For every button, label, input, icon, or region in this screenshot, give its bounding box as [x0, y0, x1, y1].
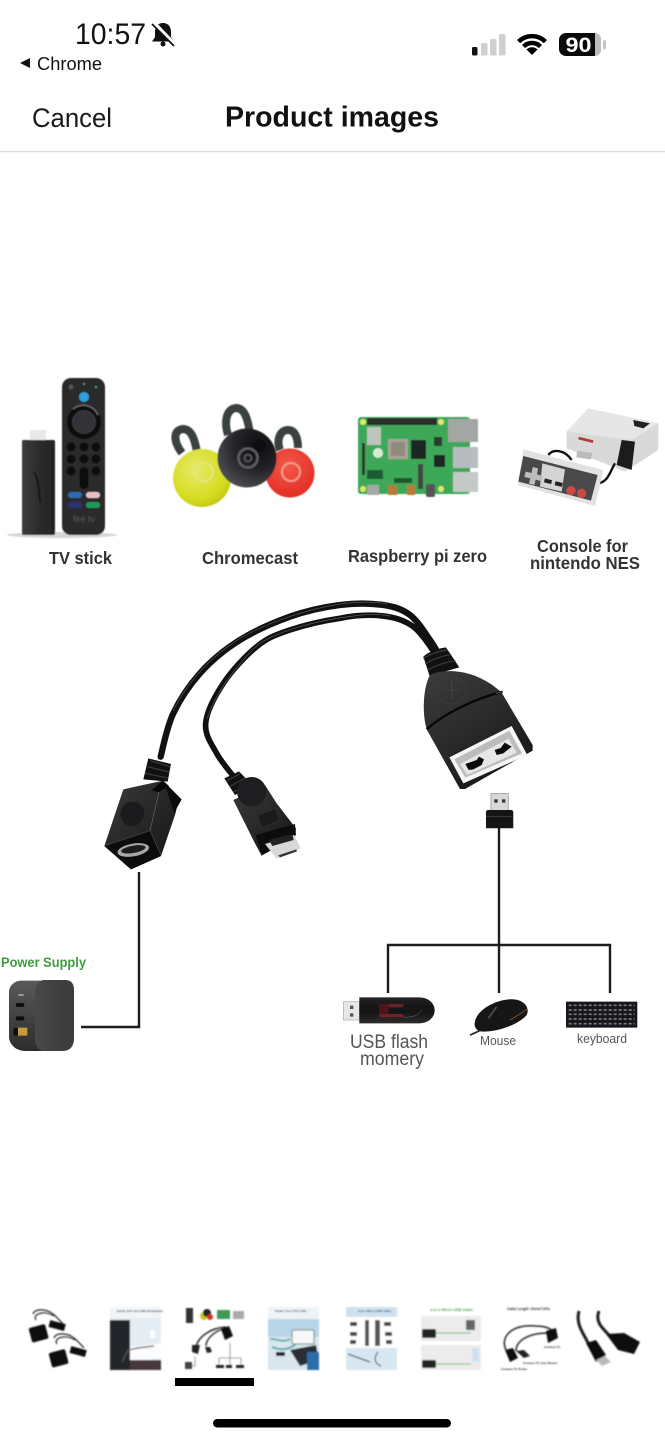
label: Console for — [537, 536, 628, 556]
thumbnail 4: phone and keyboard scene: Power Your OTG USB — [275, 1309, 307, 1313]
thumbnail strip — [28, 1307, 640, 1386]
label: Mouse — [480, 1034, 516, 1048]
icon: usb flash drive — [343, 997, 435, 1023]
female USB-A connector — [423, 647, 533, 789]
thumbnail 1: two cables — [28, 1310, 87, 1368]
icon: muted bell — [152, 23, 175, 46]
female micro USB connector — [104, 758, 182, 869]
connector lines — [81, 826, 610, 1027]
product: Raspberry pi zero — [348, 417, 487, 566]
navigation header — [0, 102, 665, 152]
thumbnail 6: usage panels — [421, 1307, 481, 1370]
icon: keyboard — [566, 1002, 637, 1028]
label: TV stick — [49, 548, 112, 568]
thumbnail 7: labelled cable: Connect To — [544, 1345, 560, 1349]
male micro USB connector — [224, 771, 301, 859]
thumbnail 7: labelled cable: Connect To Your Device — [523, 1361, 558, 1365]
USB flash memory — [343, 997, 435, 1070]
keyboard — [566, 1002, 637, 1046]
label: USB flash — [350, 1032, 428, 1053]
icon: wall charger — [9, 980, 74, 1051]
label: Raspberry pi zero — [348, 546, 487, 566]
icon: battery 90 — [559, 33, 606, 57]
power supply — [1, 955, 86, 1051]
label — [350, 1032, 428, 1070]
cable strands — [161, 602, 440, 778]
back to Chrome link: Chrome — [37, 54, 102, 74]
icon: NES console and controller — [518, 408, 658, 506]
label — [530, 536, 640, 573]
thumbnail 5: compatibility chart: 2-in-1 Micro USB Cable — [358, 1309, 391, 1313]
thumbnail 2: TV scene — [110, 1307, 163, 1370]
peripherals — [343, 997, 637, 1070]
product: Chromecast — [173, 408, 314, 568]
label: Power Supply — [1, 955, 86, 970]
thumbnail 7: labelled cable — [501, 1307, 560, 1371]
thumbnail 7: labelled cable: Connect To Power — [501, 1367, 528, 1371]
icon: signal bars — [472, 34, 506, 56]
thumbnail 8: connector close-up — [578, 1311, 640, 1366]
product: TV stick — [7, 378, 117, 568]
clock: 10:57 — [75, 18, 146, 51]
thumbnail 7: labelled cable: Cable Length: 20cm/7.87in — [507, 1307, 550, 1311]
icon: three chromecast dongles — [173, 408, 314, 507]
thumbnail 2: TV scene: Easily Add Any USB Peripherals — [117, 1309, 163, 1313]
heading: Product images — [225, 102, 439, 134]
thumbnail selection indicator — [175, 1378, 254, 1386]
label: momery — [360, 1049, 424, 1070]
cancel button: Cancel — [32, 103, 112, 133]
label: nintendo NES — [530, 553, 640, 573]
icon: raspberry pi board — [358, 417, 478, 497]
Y-splitter OTG cable — [104, 602, 533, 869]
icon: battery 90: 90 — [566, 33, 592, 57]
USB-C to USB-A adapter — [486, 793, 513, 828]
label: Chromecast — [202, 548, 298, 568]
home indicator — [213, 1419, 451, 1428]
icon: fire tv stick and remote: fire tv — [73, 514, 96, 524]
thumbnail 6: usage panels: 2-in-1 Micro USB Cable — [430, 1307, 474, 1312]
status bar — [20, 18, 606, 74]
product: Console for nintendo NES — [518, 408, 658, 573]
thumbnail 3: current image (selected) — [185, 1308, 244, 1369]
thumbnail 4: phone and keyboard scene — [268, 1307, 319, 1370]
icon: computer mouse — [470, 999, 528, 1035]
thumbnail 5: compatibility chart — [346, 1307, 397, 1370]
mouse — [470, 999, 528, 1048]
icon: wifi — [519, 36, 545, 55]
label: keyboard — [577, 1032, 627, 1046]
icon: fire tv stick and remote — [7, 378, 117, 538]
